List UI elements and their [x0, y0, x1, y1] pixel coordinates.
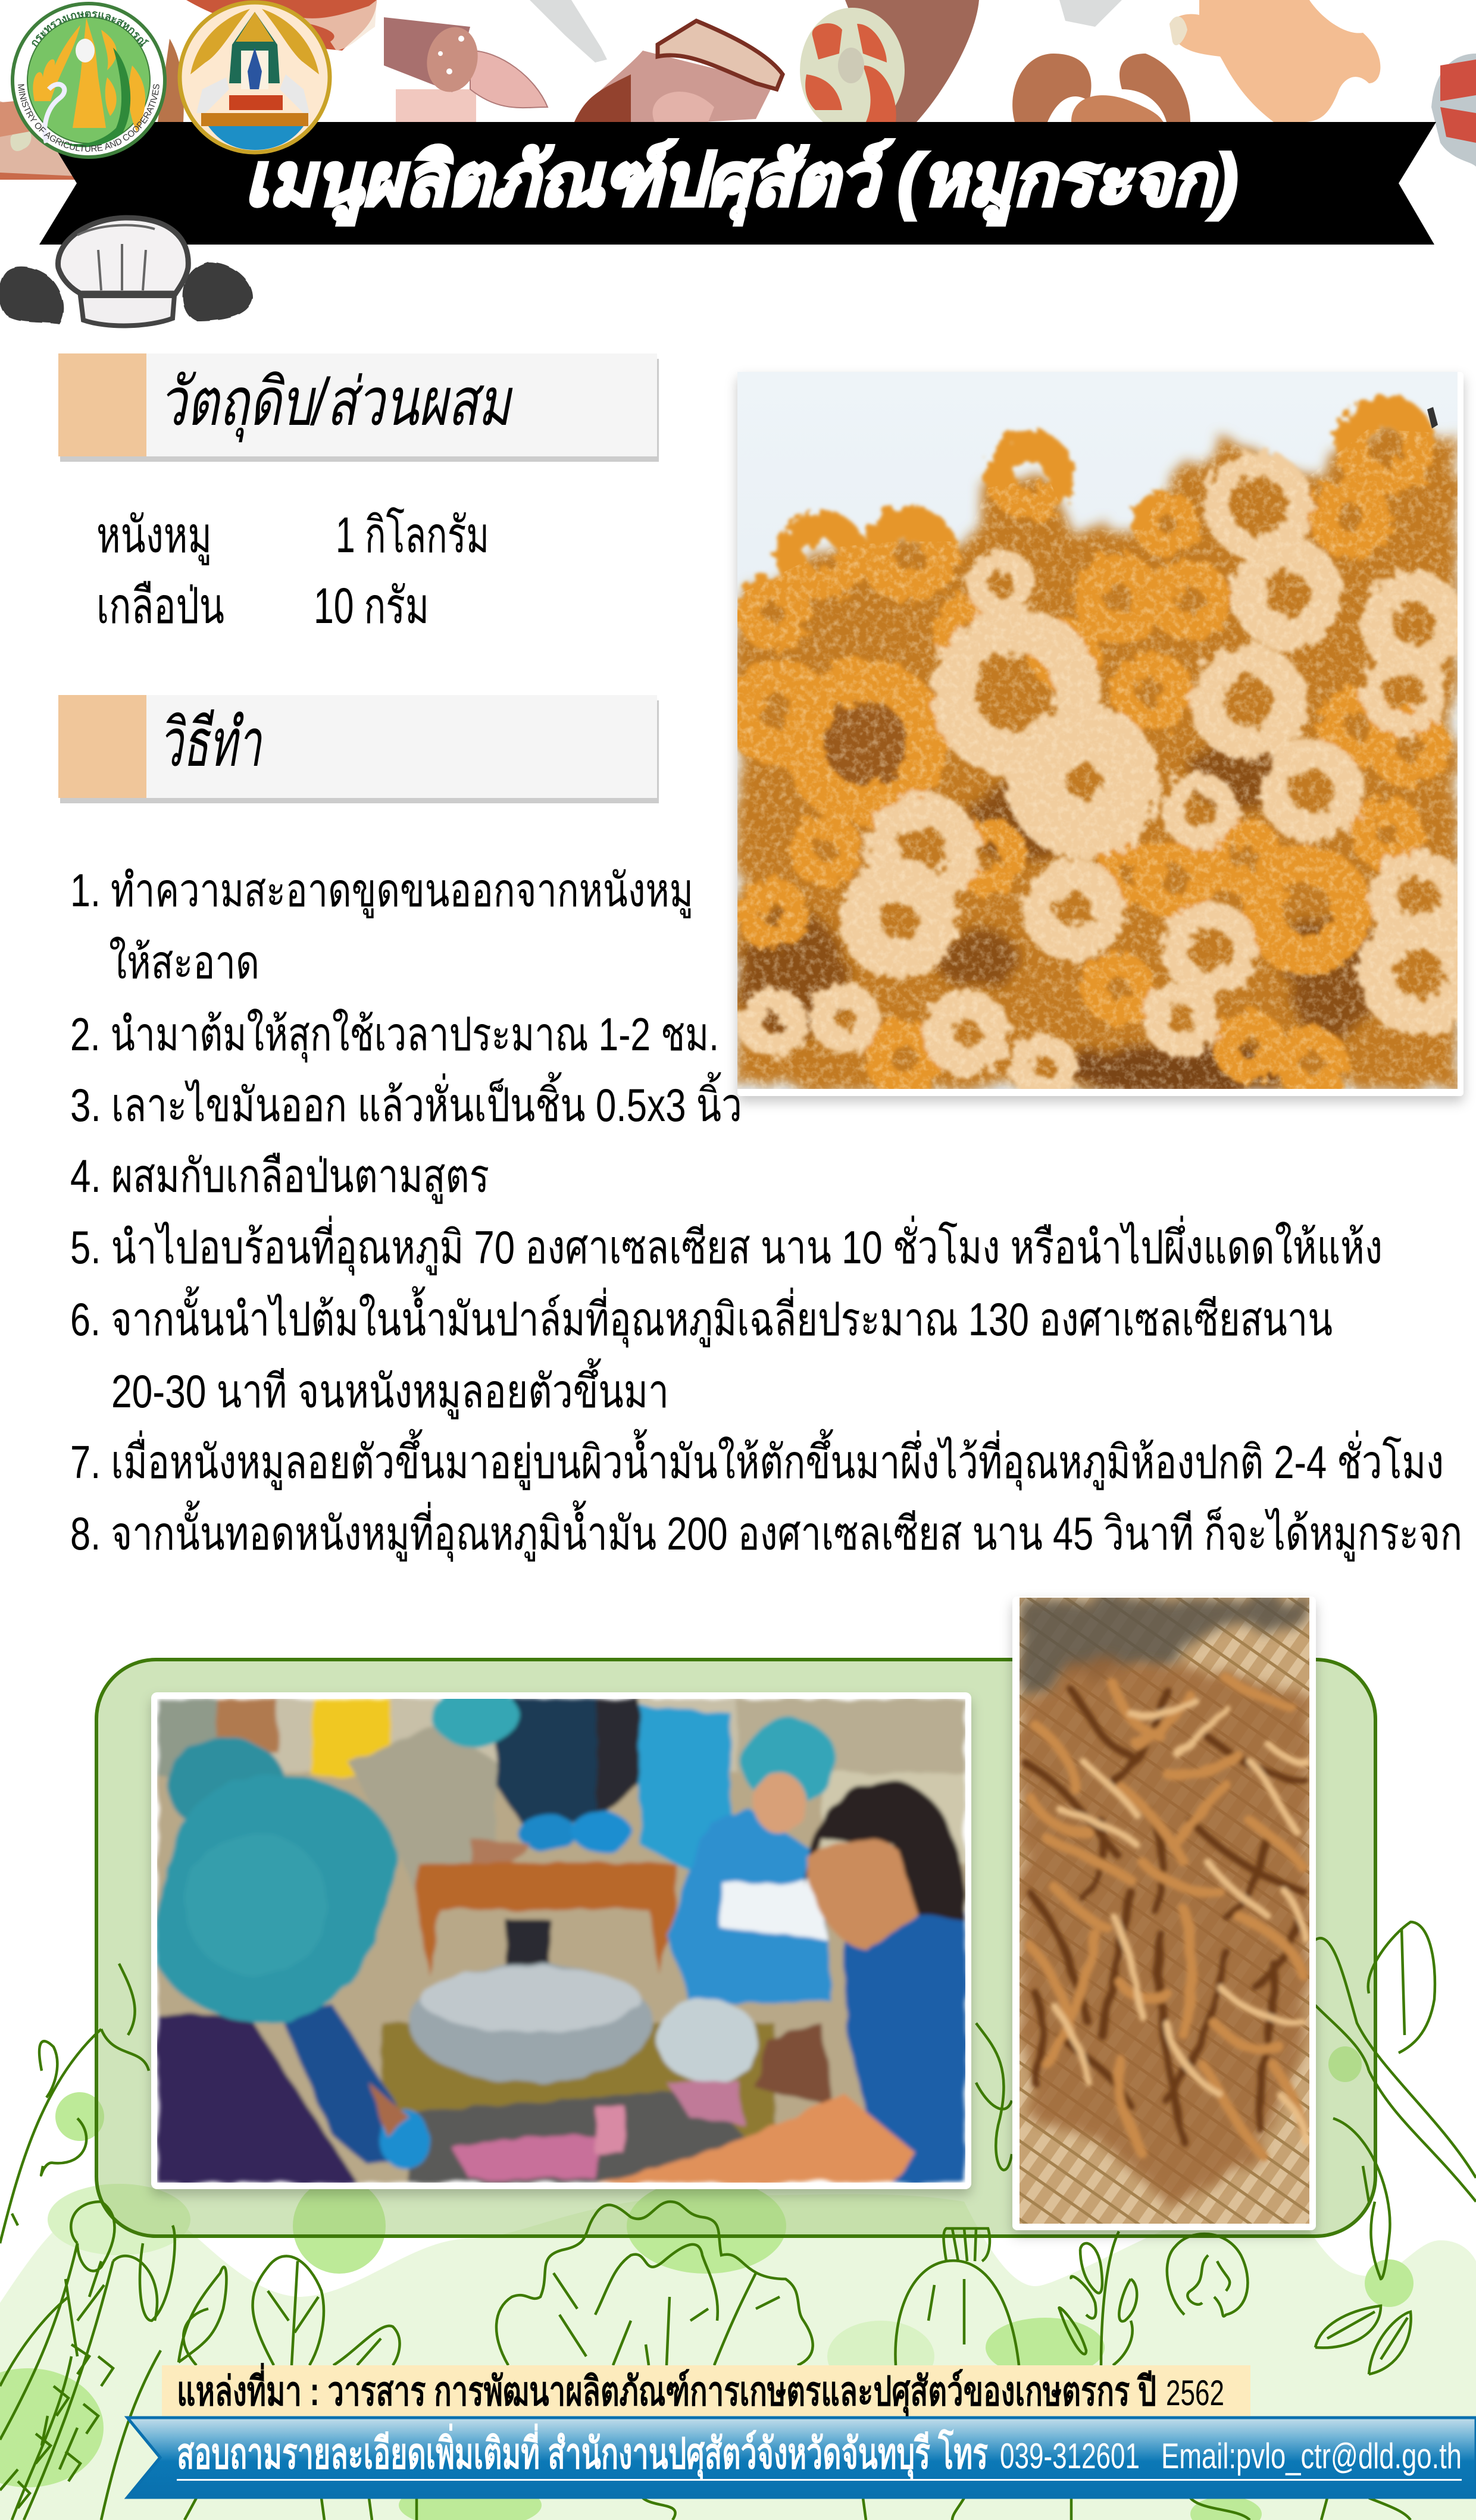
icon: mushroom [1167, 2234, 1247, 2316]
source text [177, 2362, 1224, 2416]
contact text: สอบถามรายละเอียดเพิ่มเติมที่ สำนักงานปศุสัตว์จังหวัดจันทบุรี โทร [177, 2423, 988, 2481]
icon: right leaf spray [1315, 1922, 1476, 2279]
ingredient list: เกลือป่น [96, 578, 224, 634]
right steak [183, 262, 253, 321]
photo: crispy pork crackling [737, 372, 1464, 1096]
icon: grey faint marks [530, 0, 1122, 62]
panel: ingredients [58, 353, 659, 634]
numbered steps: 4. ผสมกับเกลือป่นตามสูตร [70, 1150, 489, 1204]
numbered steps: 3. เลาะไขมันออก แล้วหั่นเป็นชิ้น 0.5x3 นิ้ว [70, 1072, 742, 1131]
contact ribbon [127, 2418, 1476, 2497]
icon: meat leg [800, 0, 979, 133]
icon: cucumber [895, 2228, 1019, 2365]
icon: chicken [1169, 0, 1380, 122]
icon: lettuce [496, 2202, 813, 2365]
vegetable line art [0, 1922, 1476, 2520]
photo: workers preparing pork skin [151, 1687, 971, 2189]
heading bar: method [58, 695, 659, 803]
contact text: 039-312601 [1000, 2436, 1140, 2476]
icon: left pink meat [0, 39, 184, 180]
icon: ham [574, 21, 783, 122]
icon: ministry seal [11, 2, 167, 159]
title banner [39, 122, 1436, 245]
ingredient list: 1 กิโลกรัม [336, 507, 489, 563]
panel: green rounded backing [96, 1660, 1375, 2236]
icon: ministry seal: MINISTRY OF AGRICULTURE AND COOPERATIVES [18, 84, 160, 152]
icon: right side vine [976, 2023, 1012, 2170]
ingredient list: 10 กรัม [314, 578, 429, 634]
icon: small herb and leaves [179, 2256, 400, 2365]
seal inscription: กระทรวงเกษตรและสหกรณ์ [32, 11, 149, 47]
numbered steps: 1. ทำความสะอาดขูดขนออกจากหนังหมู [70, 864, 693, 918]
source text: 2562 [1166, 2373, 1224, 2413]
icon: salami [384, 17, 548, 122]
icon: almond leaves [1315, 2306, 1411, 2374]
photo: dried pork skin strips on bamboo tray [1012, 1596, 1316, 2230]
icon: herb sprig [1059, 2231, 1137, 2365]
numbered steps: 20-30 นาที จนหนังหมูลอยตัวขึ้นมา [111, 1358, 669, 1419]
icon: sausages [1012, 54, 1190, 122]
icon: chef hat with meat [0, 218, 253, 325]
background: pale green hills [0, 2046, 1476, 2520]
icon: left leaf spray [0, 1964, 149, 2243]
icon: asparagus left [0, 2202, 175, 2520]
title: เมนูผลิตภัณฑ์ปศุสัตว์ (หมูกระจก) [245, 139, 1238, 225]
numbered steps [70, 864, 1462, 1562]
icon: right steak [1431, 54, 1476, 167]
heading bar: method: วิธีทำ [159, 706, 262, 780]
ingredient list: หนังหมู [96, 507, 212, 565]
numbered steps: ให้สะอาด [109, 936, 259, 988]
heading bar: ingredients [58, 353, 659, 462]
source credit bar [162, 2362, 1250, 2416]
heading bar: ingredients: วัตถุดิบ/ส่วนผสม [159, 365, 513, 443]
left steak [0, 267, 64, 324]
panel: method [58, 695, 1462, 1562]
icon: red steak [186, 0, 377, 51]
icon: greens under ribbon [185, 2498, 1411, 2520]
numbered steps: 2. นำมาต้มให้สุกใช้เวลาประมาณ 1-2 ชม. [70, 1008, 719, 1063]
ingredient list [96, 507, 489, 634]
hat [58, 218, 188, 293]
icon: livestock department seal [180, 2, 330, 152]
top meat illustrations [0, 0, 1476, 180]
